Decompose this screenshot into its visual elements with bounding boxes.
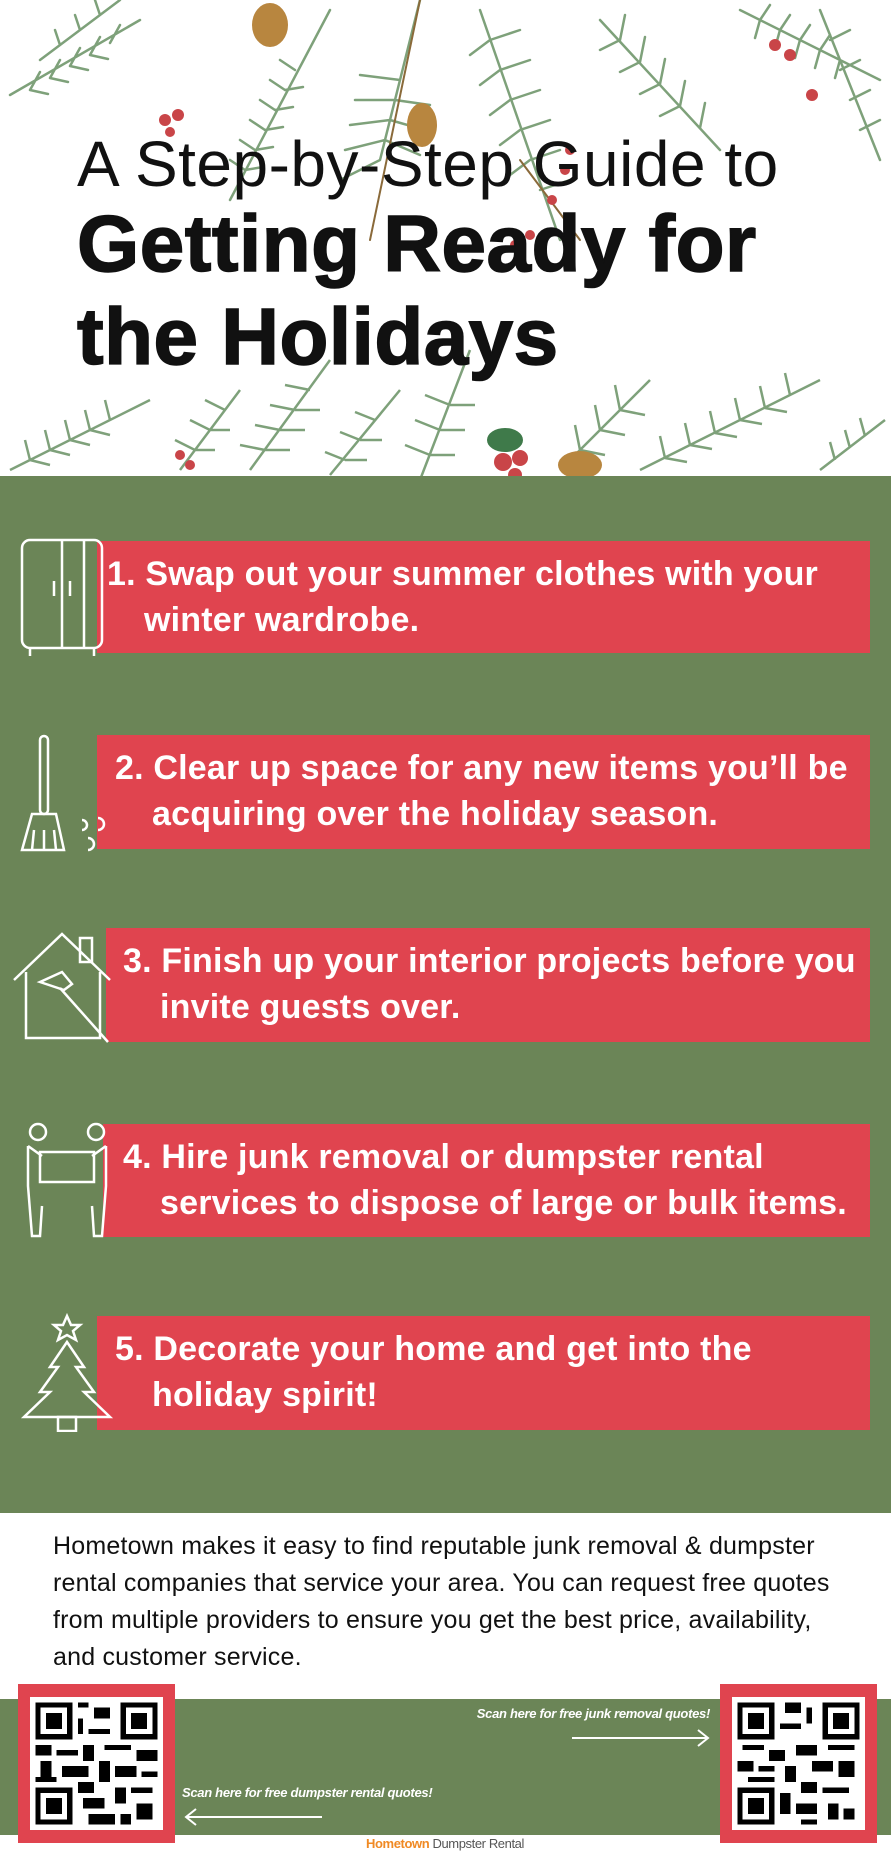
step 4	[103, 1124, 870, 1237]
title: A Step-by-Step Guide to	[77, 128, 779, 200]
callout: dumpster rental	[182, 1785, 432, 1826]
footer logo: Hometown Dumpster Rental	[366, 1836, 524, 1851]
step 2: acquiring over the holiday season.	[152, 795, 718, 833]
step 5: holiday spirit!	[152, 1376, 378, 1414]
text block: about Hometown: from multiple providers to ensure you get the best price, availability,	[53, 1606, 812, 1634]
text block: about Hometown	[53, 1532, 830, 1671]
icon: wardrobe	[20, 538, 104, 656]
step 4: services to dispose of large or bulk items.	[160, 1184, 847, 1222]
step 3: invite guests over.	[160, 988, 460, 1026]
icon: broom	[20, 734, 106, 852]
text block: about Hometown: and customer service.	[53, 1643, 302, 1671]
arrow right	[572, 1729, 710, 1747]
title: the Holidays	[77, 292, 559, 381]
panel: QR band	[0, 1699, 891, 1835]
callout: junk removal: Scan here for free junk removal quotes!	[477, 1706, 710, 1721]
step 2: 2. Clear up space for any new items you’ll be	[115, 749, 848, 787]
step 4: 4. Hire junk removal or dumpster rental	[123, 1138, 764, 1176]
text block: about Hometown: Hometown makes it easy to find reputable junk removal & dumpster	[53, 1532, 815, 1560]
icon: house with hammer	[13, 932, 111, 1043]
decoration: top pine branches	[8, 0, 886, 476]
step 3	[106, 928, 870, 1042]
text block: about Hometown: rental companies that service your area. You can request free quotes	[53, 1569, 830, 1597]
QR code right	[720, 1684, 877, 1843]
callout: dumpster rental: Scan here for free dumpster rental quotes!	[182, 1785, 432, 1800]
step 3: 3. Finish up your interior projects before you	[123, 942, 856, 980]
panel: steps	[0, 476, 891, 1513]
callout: junk removal	[476, 1706, 710, 1747]
icon: movers	[26, 1122, 108, 1238]
QR code left	[18, 1684, 175, 1843]
step 5	[97, 1316, 870, 1430]
icon: christmas tree	[21, 1313, 113, 1432]
step 1: 1. Swap out your summer clothes with your	[107, 555, 818, 593]
step 2	[97, 735, 870, 849]
step 5: 5. Decorate your home and get into the	[115, 1330, 752, 1368]
title	[77, 128, 779, 382]
step 1: winter wardrobe.	[144, 601, 419, 639]
title: Getting Ready for	[77, 199, 757, 288]
step 1	[97, 541, 870, 653]
arrow left	[184, 1808, 322, 1826]
